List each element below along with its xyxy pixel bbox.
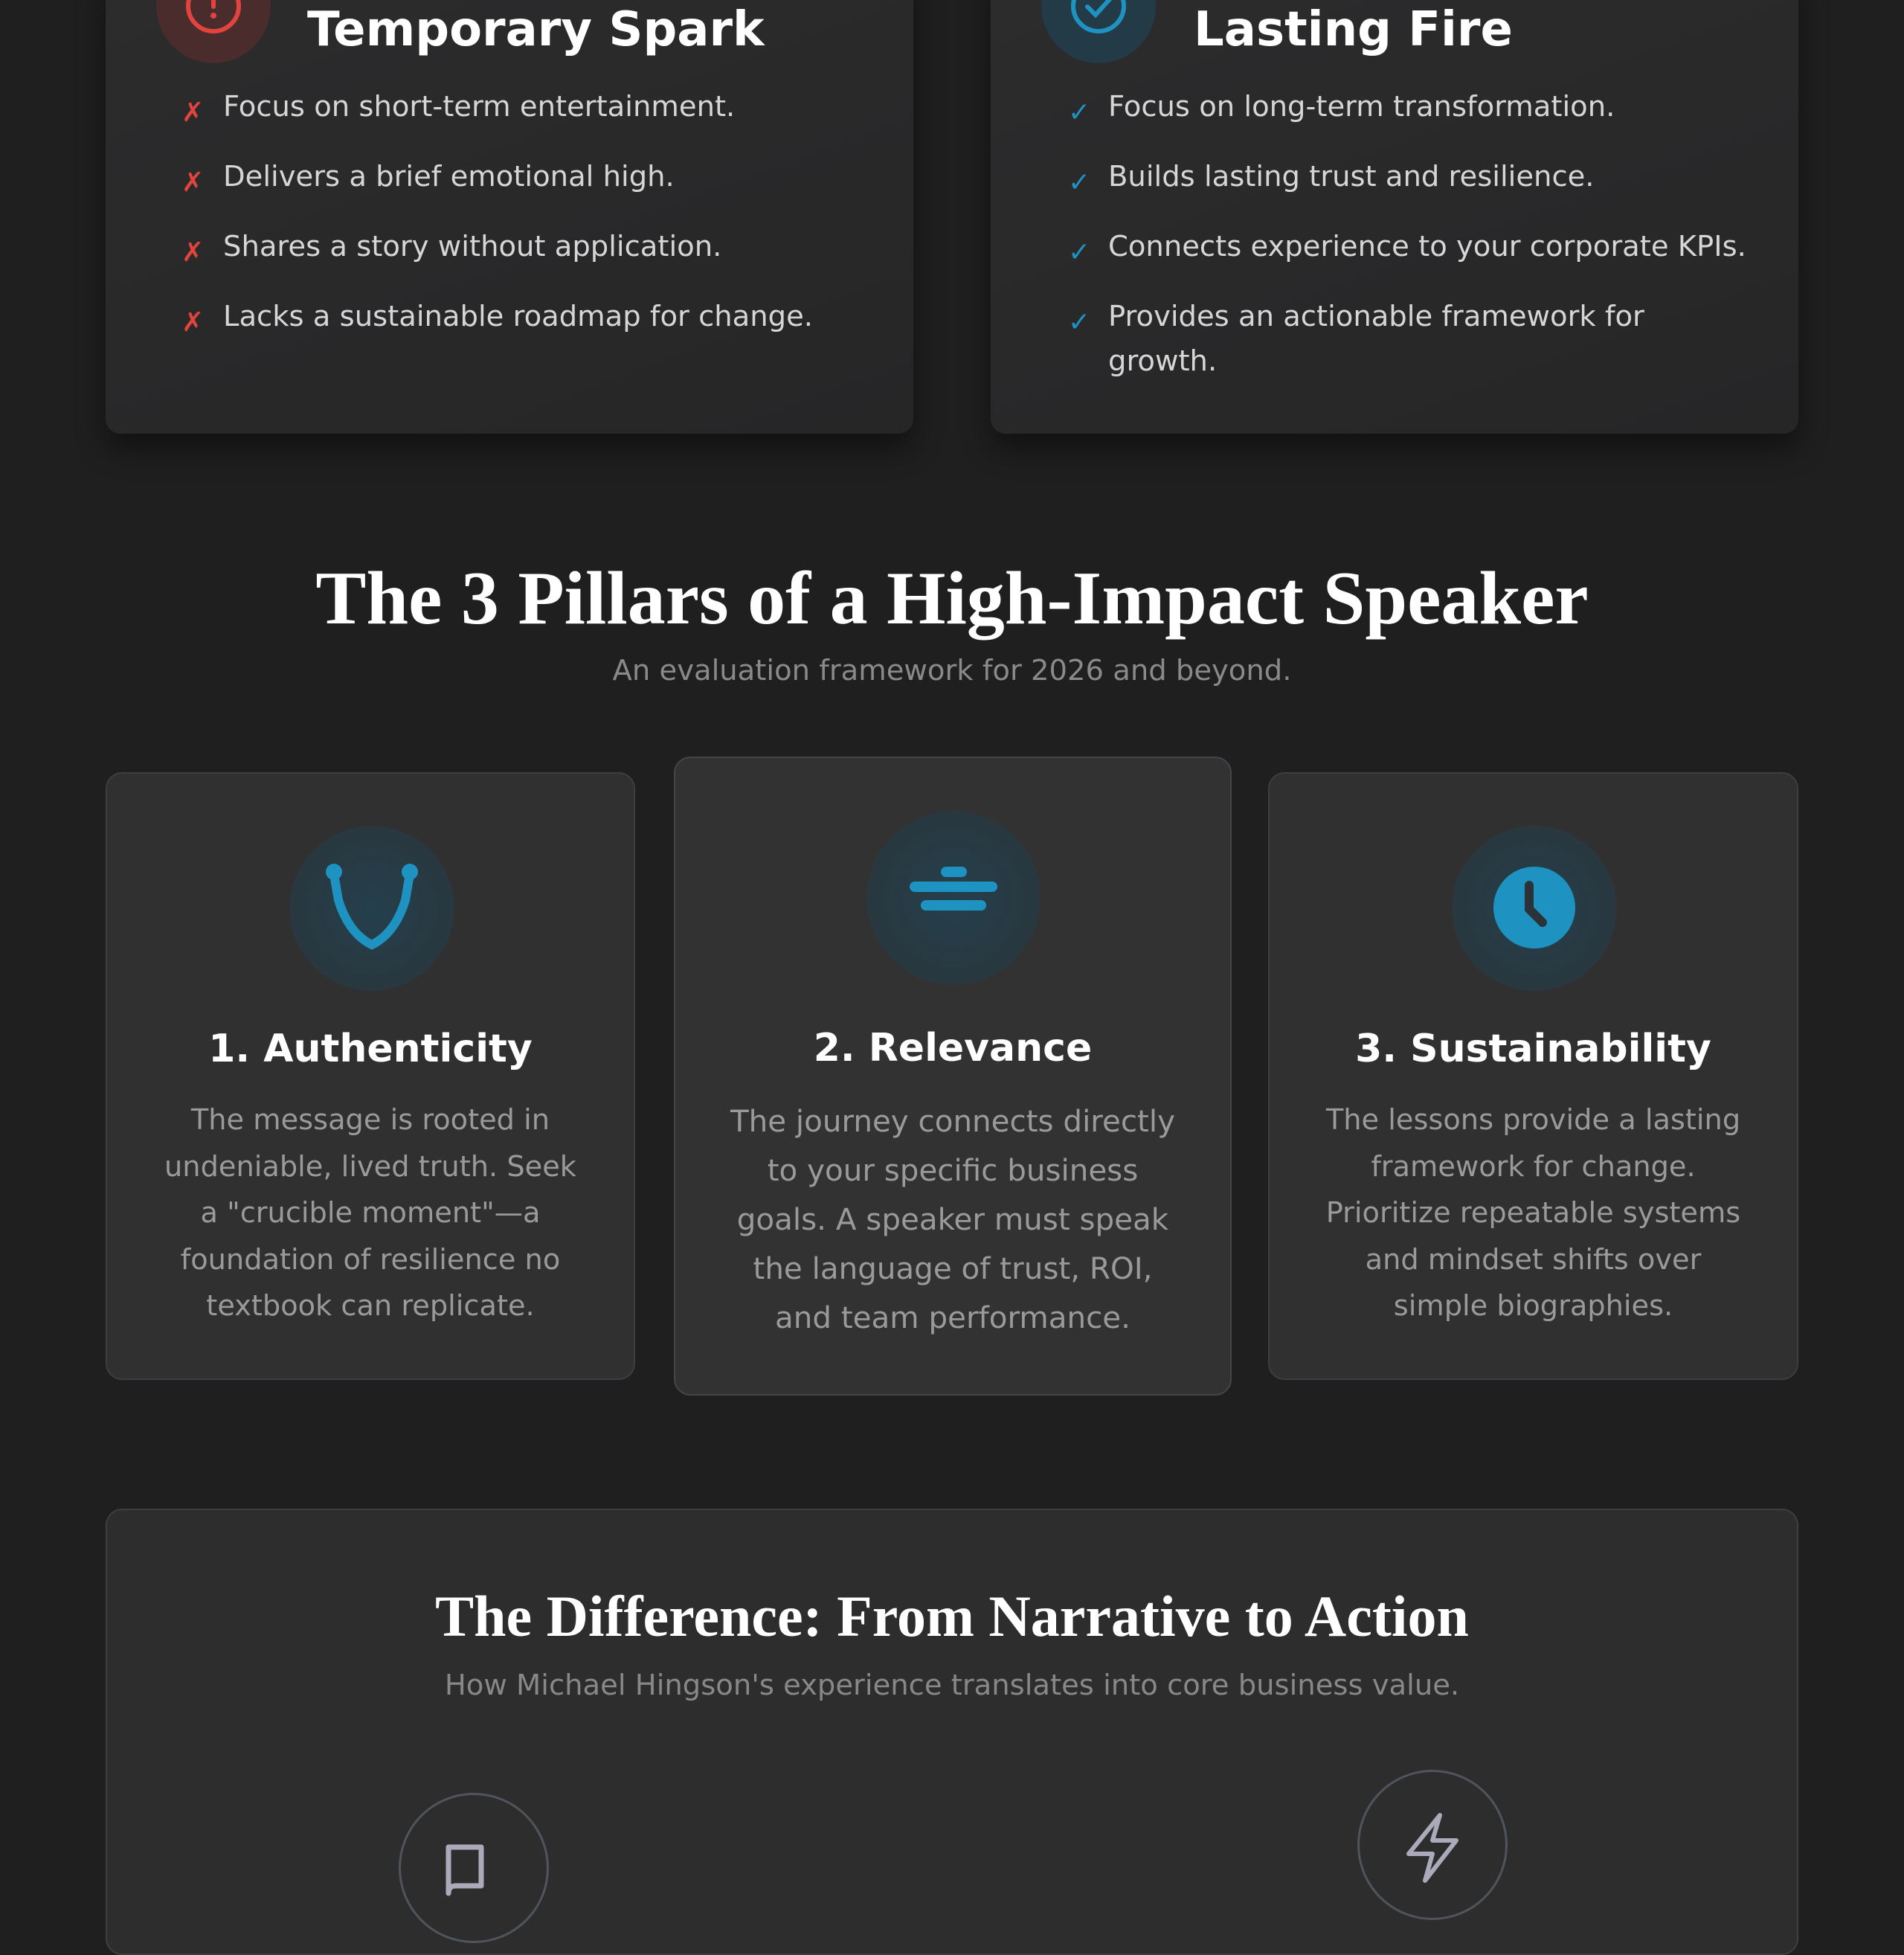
title: difference: The Difference: From Narrative to Action: [435, 1584, 1469, 1649]
heading: lasting fire: Lasting Fire: [1194, 2, 1513, 57]
list: spark items: [181, 90, 813, 338]
heading: temporary spark: Temporary Spark: [307, 2, 765, 57]
body: The journey connects directly to your specific business goals. A speaker must speak the language of trust, ROI, and team performance.: [730, 1103, 1175, 1335]
list: fire items: Provides an actionable framework for growth.: [1108, 300, 1644, 378]
list: spark items: Delivers a brief emotional high.: [223, 160, 675, 193]
icon: alert: [156, 0, 271, 63]
icon: book: [399, 1793, 549, 1943]
list: spark items: ✗: [181, 97, 204, 128]
panel: relevance: [674, 757, 1232, 1396]
list: fire items: Connects experience to your corporate KPIs.: [1108, 230, 1746, 263]
list: fire items: ✓: [1068, 97, 1090, 128]
list: spark items: Focus on short-term entertainment.: [223, 90, 735, 123]
panel: temporary spark: [106, 0, 913, 434]
icon: lightning: [1357, 1770, 1508, 1920]
title: pillars: The 3 Pillars of a High-Impact Speaker: [315, 556, 1589, 641]
heading: 2. Relevance: [814, 1026, 1092, 1070]
list: spark items: ✗: [181, 167, 204, 198]
body: The message is rooted in undeniable, lived truth. Seek a "crucible moment"—a foundation of resilience no textbook can replicate.: [164, 1103, 576, 1323]
subtitle: pillars: An evaluation framework for 2026 and beyond.: [613, 654, 1291, 687]
list: fire items: [1068, 90, 1746, 378]
icon: magnet: [289, 826, 454, 991]
icon: clock: [1452, 826, 1617, 991]
heading: 3. Sustainability: [1355, 1027, 1711, 1071]
icon: check: [1041, 0, 1156, 63]
heading: 1. Authenticity: [208, 1027, 533, 1071]
list: fire items: Focus on long-term transformation.: [1108, 90, 1615, 123]
panel: difference: [106, 1509, 1798, 1955]
list: spark items: ✗: [181, 237, 204, 268]
list: fire items: ✓: [1068, 307, 1090, 338]
list: fire items: ✓: [1068, 167, 1090, 198]
subtitle: difference: How Michael Hingson's experience translates into core business value.: [445, 1669, 1459, 1702]
list: fire items: ✓: [1068, 237, 1090, 268]
list: spark items: ✗: [181, 307, 204, 338]
panel: sustainability: [1268, 772, 1798, 1380]
list: fire items: Builds lasting trust and resilience.: [1108, 160, 1595, 193]
list: spark items: Lacks a sustainable roadmap for change.: [223, 300, 813, 333]
panel: authenticity: [106, 772, 635, 1380]
panel: lasting fire: [991, 0, 1798, 434]
list: spark items: Shares a story without application.: [223, 230, 721, 263]
body: The lessons provide a lasting framework for change. Prioritize repeatable systems and mindset shifts over simple biographies.: [1326, 1103, 1740, 1323]
icon: equals: [866, 811, 1041, 985]
